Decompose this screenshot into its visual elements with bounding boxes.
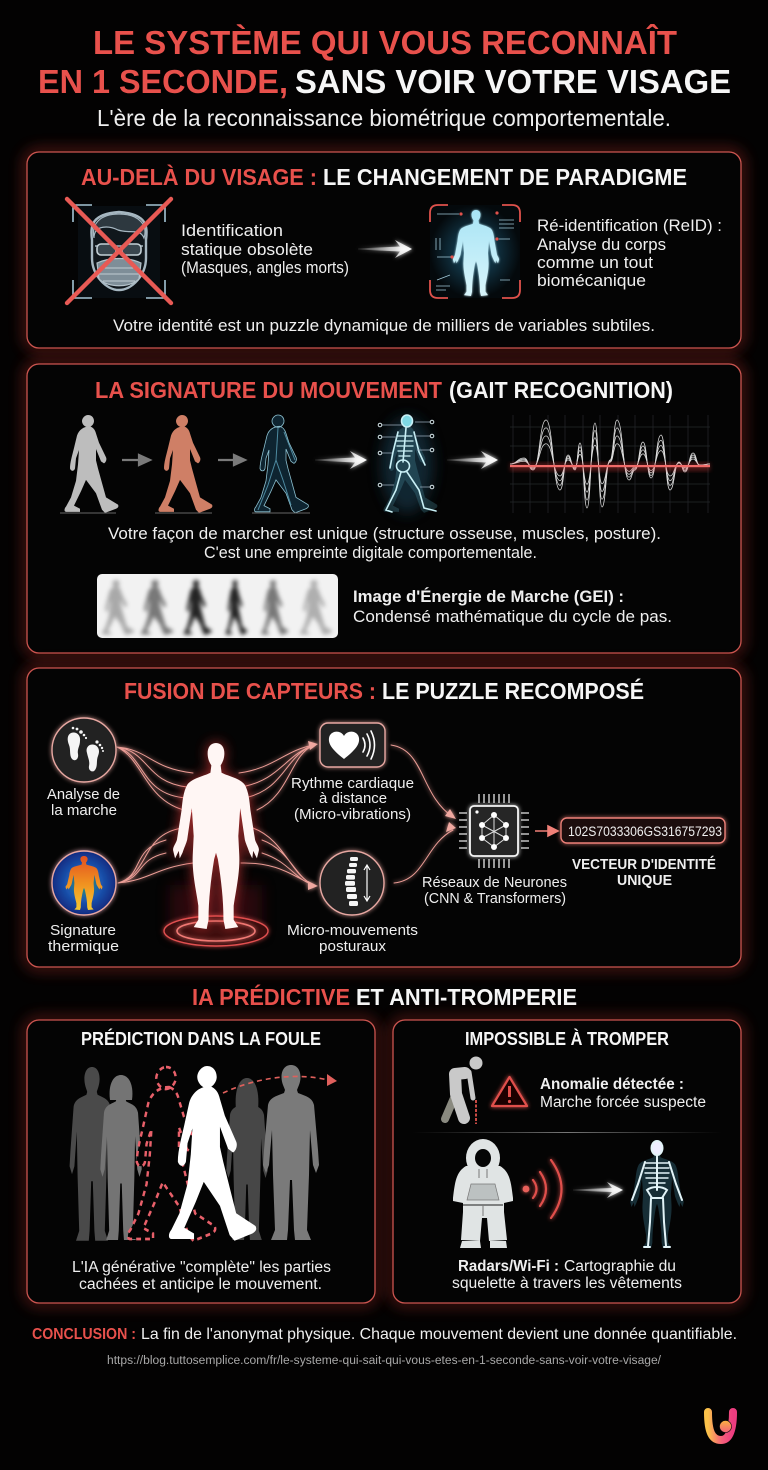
- icon: warning: [492, 1077, 527, 1106]
- label: à distance: [319, 790, 387, 807]
- figure: muscles: [155, 415, 212, 513]
- conclusion: La fin de l'anonymat physique. Chaque mouvement devient une donnée quantifiable.: [141, 1326, 737, 1343]
- arrow: [218, 455, 245, 465]
- caption: L'IA générative "complète" les parties: [72, 1259, 331, 1276]
- label: Analyse de: [47, 786, 120, 803]
- text: façon de marcher: C'est une empreinte digitale comportementale.: [204, 543, 537, 562]
- label: Rythme cardiaque: [291, 775, 414, 792]
- heading: [124, 677, 644, 704]
- label: [572, 856, 716, 889]
- icon: limping person: [445, 1056, 482, 1124]
- text: ré-identification: biomécanique: [537, 272, 646, 290]
- source url: https://blog.tuttosemplice.com/fr/le-systeme-qui-sait-qui-vous-etes-en-1-seconde-sans-voir-votre-visage/: [107, 1355, 662, 1367]
- label: Réseaux de Neurones: [422, 874, 567, 891]
- label: [48, 922, 119, 955]
- figure: walking body: [60, 415, 118, 513]
- icon: hooded person: [453, 1139, 513, 1248]
- panel: signature du mouvement: [27, 364, 741, 653]
- caption: cachées et anticipe le mouvement.: [79, 1276, 322, 1293]
- text: anomalie: Marche forcée suspecte: [540, 1094, 706, 1111]
- heading: [81, 163, 687, 190]
- subtitle: L'ère de la reconnaissance biométrique comportementale.: [97, 105, 671, 131]
- icon: heart rate: [320, 723, 385, 767]
- crowd illustration: [70, 1065, 337, 1241]
- connecting curves: [117, 741, 456, 890]
- panel: prédiction dans la foule: [27, 1020, 375, 1303]
- label: [422, 874, 567, 907]
- text: identification statique: Identification: [181, 222, 283, 240]
- heading: AU-DELÀ DU VISAGE :: [81, 163, 317, 190]
- icon: body scan: [430, 205, 520, 298]
- heading: IA prédictive: ET ANTI-TROMPERIE: [356, 984, 577, 1010]
- heading: FUSION DE CAPTEURS :: [124, 678, 376, 704]
- icon: skeleton: [630, 1140, 684, 1248]
- heading: LE PUZZLE RECOMPOSÉ: [382, 677, 644, 704]
- text: ré-identification: comme un tout: [537, 254, 653, 272]
- arrow: [358, 240, 412, 258]
- label: [287, 922, 418, 955]
- icon: thermal signature: [52, 851, 116, 915]
- title: EN 1 SECONDE,: [38, 63, 288, 100]
- heading: IA prédictive: [192, 983, 577, 1010]
- icon: spine: [320, 851, 384, 915]
- icon: footprints: [52, 718, 116, 782]
- panel: fusion de capteurs: [27, 668, 741, 967]
- panel: impossible à tromper: [393, 1020, 741, 1303]
- caption: [452, 1258, 682, 1292]
- label: (CNN & Transformers): [424, 890, 566, 907]
- text: anomalie: [540, 1076, 706, 1111]
- text: ré-identification: Analyse du corps: [537, 236, 666, 254]
- label: [47, 786, 120, 819]
- label: [291, 775, 414, 823]
- text: identification statique: statique obsolète: [181, 241, 313, 259]
- caption: squelette à travers les vêtements: [452, 1275, 682, 1292]
- heading: LE CHANGEMENT DE PARADIGME: [323, 164, 687, 190]
- title: LE SYSTÈME QUI VOUS RECONNAÎT: [93, 24, 677, 61]
- heading: LA SIGNATURE DU MOUVEMENT: [95, 377, 442, 403]
- caption: Radars/Wi-Fi :: [458, 1258, 559, 1275]
- text: GEI: Image d'Énergie de Marche (GEI) :: [353, 587, 624, 606]
- text: identification statique: [181, 222, 349, 277]
- arrow: [447, 451, 498, 469]
- heading: IA prédictive: IA PRÉDICTIVE: [192, 983, 350, 1010]
- panel: au-delà du visage: [27, 152, 741, 348]
- title: SANS VOIR VOTRE VISAGE: [295, 63, 731, 100]
- statement: Votre identité est un puzzle dynamique de milliers de variables subtiles.: [113, 316, 655, 335]
- icon: neural chip: [459, 794, 529, 868]
- heading: PRÉDICTION DANS LA FOULE: [81, 1028, 321, 1049]
- text: façon de marcher: Votre façon de marcher est unique (structure osseuse, muscles, posture).: [108, 524, 661, 543]
- caption: Cartographie du: [564, 1258, 676, 1275]
- title: [38, 24, 731, 100]
- logo: [708, 1412, 733, 1440]
- icon: radar waves: [523, 1160, 562, 1218]
- text: GEI: Condensé mathématique du cycle de pas.: [353, 607, 672, 626]
- heading: [95, 377, 673, 403]
- label: Micro-mouvements: [287, 922, 418, 939]
- text: identification statique: (Masques, angles morts): [181, 259, 349, 277]
- text: anomalie: Anomalie détectée :: [540, 1076, 684, 1093]
- figure: skeleton with joints: [378, 415, 437, 513]
- label: UNIQUE: [617, 872, 672, 889]
- heading: IMPOSSIBLE À TROMPER: [465, 1028, 669, 1049]
- identity vector box: [561, 818, 725, 843]
- text: ré-identification: Ré-identification (ReID) :: [537, 217, 722, 235]
- label: posturaux: [319, 938, 387, 955]
- identity vector box: 102S7033306GS316757293: [568, 824, 722, 839]
- arrow: [573, 1182, 623, 1198]
- caption: [72, 1259, 331, 1293]
- text: GEI: [353, 587, 672, 626]
- icon: crossed-out masked face: [67, 199, 171, 303]
- label: (Micro-vibrations): [294, 806, 411, 823]
- text: façon de marcher: [108, 524, 661, 562]
- arrow: [122, 455, 150, 465]
- label: la marche: [51, 802, 117, 819]
- label: Signature: [50, 922, 116, 939]
- conclusion: CONCLUSION :: [32, 1326, 136, 1343]
- heading: (GAIT RECOGNITION): [449, 377, 673, 403]
- text: ré-identification: [537, 217, 722, 290]
- figure: vascular x-ray: [252, 415, 310, 513]
- label: VECTEUR D'IDENTITÉ: [572, 856, 716, 873]
- central body on platform: [164, 743, 268, 946]
- arrow: [535, 826, 558, 836]
- arrow: [315, 451, 367, 469]
- image: gait energy image: [97, 574, 338, 638]
- chart: gait waveform: [510, 415, 710, 513]
- label: thermique: [48, 938, 119, 955]
